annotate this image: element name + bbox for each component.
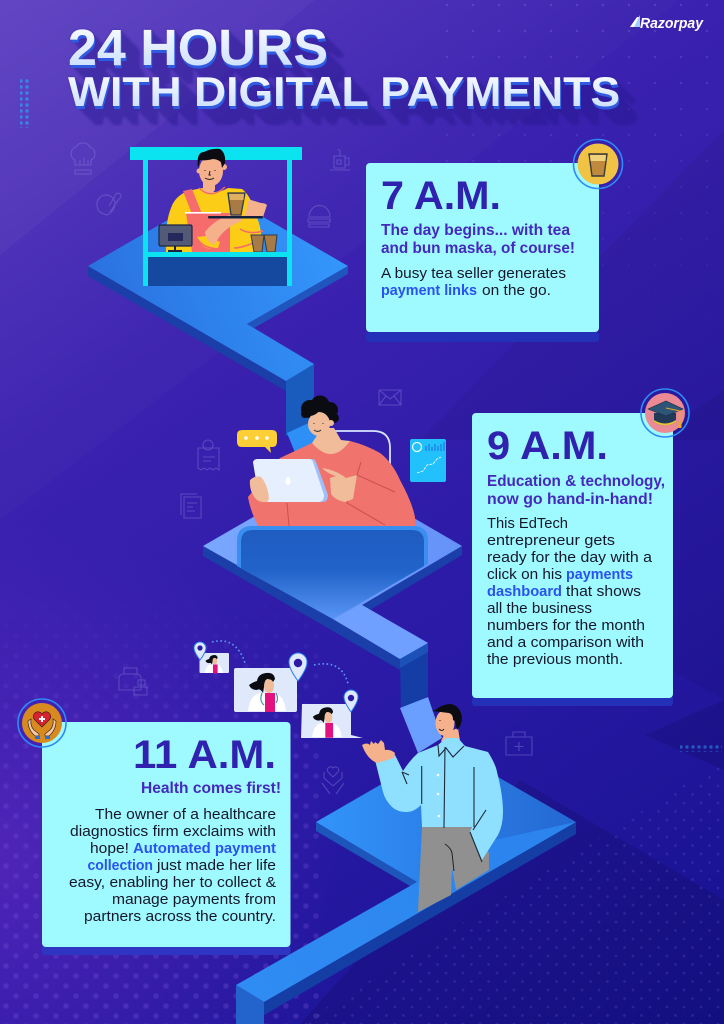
panel: 9 A.M.: dashboard bbox=[487, 583, 562, 600]
panel: 11 A.M.: just made her life bbox=[156, 857, 276, 874]
title: WITH DIGITAL PAYMENTS bbox=[68, 68, 620, 115]
panel: 9 A.M.: all the business bbox=[487, 600, 592, 617]
icon: tea glass badge bbox=[574, 140, 622, 188]
icon: first aid kit bbox=[506, 732, 532, 755]
small tea cups bbox=[251, 235, 277, 252]
panel: 11 A.M.: diagnostics firm exclaims with bbox=[70, 823, 276, 840]
chair line bbox=[335, 431, 390, 468]
decorative dot column bbox=[20, 77, 29, 128]
scene: healthcare owner bbox=[362, 704, 503, 912]
hand bbox=[362, 740, 395, 763]
panel: 9 A.M.: 9 A.M. bbox=[487, 424, 608, 468]
panel: 9 A.M.: now go hand-in-hand! bbox=[487, 491, 653, 508]
icon: caring hands bbox=[322, 767, 344, 794]
panel: 7 A.M.: payment links bbox=[381, 282, 477, 299]
map pins bbox=[194, 642, 358, 712]
icon: chef hat bbox=[71, 143, 95, 174]
panel: 11 A.M.: partners across the country. bbox=[84, 908, 276, 925]
title: 24 HOURS bbox=[68, 19, 328, 76]
ghost icons bbox=[71, 143, 532, 794]
dashboard panel bbox=[410, 439, 446, 482]
icon: envelope bbox=[379, 390, 401, 405]
shirt bbox=[375, 738, 503, 860]
dotted route arcs bbox=[212, 641, 348, 684]
stall roof bbox=[130, 147, 302, 160]
logo: Razorpay: Razorpay bbox=[640, 15, 704, 32]
person bbox=[248, 396, 415, 526]
panel: 9 A.M.: This EdTech bbox=[487, 515, 568, 532]
panel: 7 A.M. bbox=[366, 163, 599, 332]
staircase path bbox=[88, 191, 576, 1024]
card shadows bbox=[42, 332, 673, 955]
panel: 9 A.M.: Education & technology, bbox=[487, 473, 665, 490]
panel: 9 A.M.: the previous month. bbox=[487, 651, 623, 668]
icon: tea mug bbox=[330, 149, 350, 170]
title bbox=[68, 19, 620, 115]
icon: receipt bbox=[198, 440, 219, 470]
panel: 11 A.M. bbox=[42, 722, 290, 947]
panel: 9 A.M. bbox=[472, 413, 673, 698]
trousers bbox=[418, 827, 489, 912]
large doctor card bbox=[234, 668, 297, 712]
neck and head bbox=[441, 728, 460, 748]
panel: 7 A.M.: and bun maska, of course! bbox=[381, 240, 575, 257]
small doctor card bbox=[200, 653, 229, 673]
panel: 7 A.M.: The day begins... with tea bbox=[381, 222, 570, 239]
icon: documents bbox=[181, 494, 201, 518]
panel: 9 A.M.: entrepreneur gets bbox=[487, 532, 615, 549]
stall frame bbox=[143, 160, 292, 286]
tea seller bbox=[166, 149, 267, 252]
decorative dot row bbox=[680, 744, 722, 752]
panel: 9 A.M.: click on his bbox=[487, 566, 562, 583]
panel: 11 A.M.: collection bbox=[88, 857, 153, 874]
icon: graduation cap badge bbox=[641, 389, 689, 437]
panel: 11 A.M.: easy, enabling her to collect & bbox=[69, 874, 276, 891]
scene: doctor video cards bbox=[194, 641, 363, 738]
panel: 11 A.M.: Automated payment bbox=[133, 840, 276, 857]
panel: 7 A.M.: 7 A.M. bbox=[381, 174, 501, 218]
panel: 11 A.M.: The owner of a healthcare bbox=[95, 806, 276, 823]
scene: tea stall bbox=[130, 147, 302, 286]
panel: 9 A.M.: ready for the day with a bbox=[487, 549, 653, 566]
icon: caring hands badge bbox=[18, 699, 66, 747]
icon: burger bbox=[308, 205, 330, 227]
panel: 7 A.M.: on the go. bbox=[482, 282, 551, 299]
seat bbox=[237, 526, 428, 619]
panel: 7 A.M.: A busy tea seller generates bbox=[381, 265, 566, 282]
monitor bbox=[159, 225, 192, 252]
right doctor card bbox=[301, 704, 363, 738]
panel: 11 A.M.: Health comes first! bbox=[141, 780, 281, 797]
icon: spoon bbox=[97, 193, 121, 215]
panel: 11 A.M.: hope! bbox=[90, 840, 129, 857]
chat bubble bbox=[237, 430, 277, 453]
panel: 9 A.M.: numbers for the month bbox=[487, 617, 645, 634]
panel: 9 A.M.: and a comparison with bbox=[487, 634, 644, 651]
panel: 11 A.M.: 11 A.M. bbox=[133, 733, 276, 777]
panel: 9 A.M.: payments bbox=[566, 566, 633, 583]
icon: jars bbox=[119, 668, 147, 695]
panel: 11 A.M.: manage payments from bbox=[112, 891, 276, 908]
scene: edtech entrepreneur bbox=[237, 396, 446, 619]
panel: 9 A.M.: that shows bbox=[566, 583, 641, 600]
